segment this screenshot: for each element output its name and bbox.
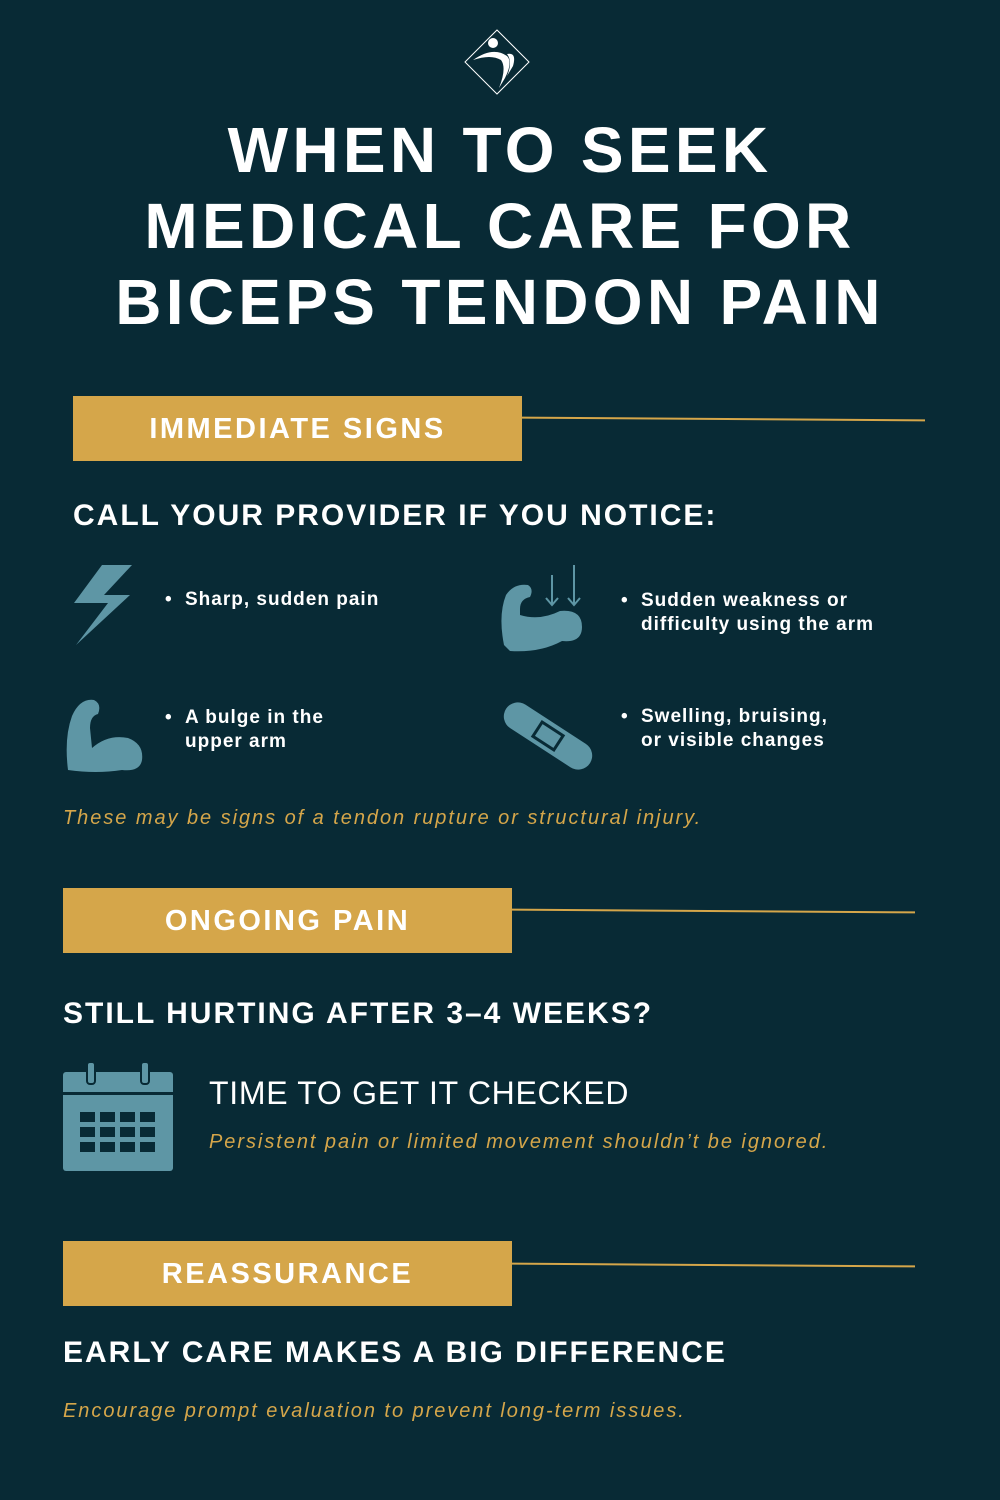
banner: reassurance: [63, 1241, 512, 1306]
icon: bandage: [504, 702, 592, 770]
banner: ongoing pain: ONGOING PAIN: [165, 905, 410, 937]
note: persistent: Persistent pain or limited movement shouldn’t be ignored.: [209, 1131, 829, 1153]
heading: still hurting: STILL HURTING AFTER 3–4 WEEKS?: [63, 997, 653, 1030]
banner: immediate signs: [73, 396, 522, 461]
icon: flexed arm: [66, 700, 142, 772]
banner: reassurance: REASSURANCE: [162, 1258, 413, 1290]
banner: ongoing pain: [63, 888, 512, 953]
heading: time to check: TIME TO GET IT CHECKED: [209, 1075, 629, 1111]
item: bulge: A bulge in the: [185, 707, 324, 728]
item: swelling: Swelling, bruising,: [641, 706, 828, 727]
item: bulge: [185, 706, 324, 754]
item: weakness: Sudden weakness or: [641, 590, 848, 611]
note: encourage: Encourage prompt evaluation to prevent long-term issues.: [63, 1400, 686, 1422]
title: MEDICAL CARE FOR: [144, 190, 856, 262]
banner: immediate signs: IMMEDIATE SIGNS: [149, 413, 446, 445]
item: bulge: upper arm: [185, 731, 287, 752]
icon: calendar: [63, 1063, 173, 1171]
title: BICEPS TENDON PAIN: [115, 266, 885, 338]
heading: early care: EARLY CARE MAKES A BIG DIFFERENCE: [63, 1336, 727, 1369]
logo: [464, 29, 530, 95]
title: WHEN TO SEEK: [228, 114, 772, 186]
title: [115, 114, 885, 338]
item: weakness: difficulty using the arm: [641, 614, 874, 635]
icon: lightning: [74, 565, 132, 645]
item: swelling: or visible changes: [641, 730, 825, 751]
item: swelling: [641, 705, 828, 753]
item: sharp pain: Sharp, sudden pain: [185, 589, 379, 610]
item: weakness: [641, 589, 874, 637]
note: rupture: These may be signs of a tendon rupture or structural injury.: [63, 807, 702, 829]
heading: call provider: CALL YOUR PROVIDER IF YOU NOTICE:: [73, 499, 717, 532]
icon: weak arm: [501, 565, 582, 652]
